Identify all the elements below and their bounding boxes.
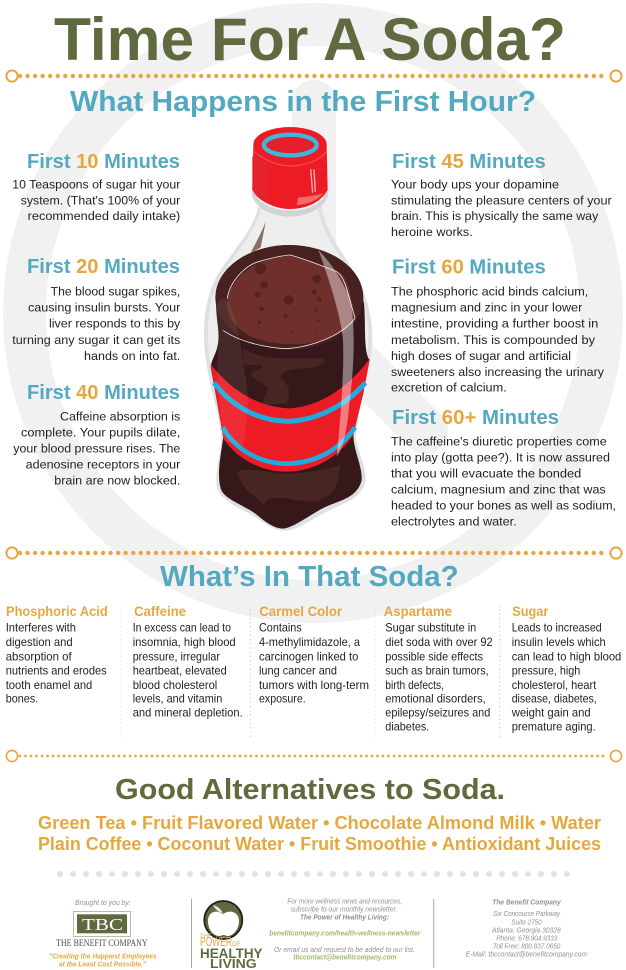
description bbox=[6, 622, 107, 705]
description: insomnia, high blood bbox=[133, 636, 236, 649]
column: caffeine bbox=[133, 603, 243, 720]
body text: Caffeine absorption is bbox=[60, 409, 180, 423]
panel: first 60+ minutes bbox=[391, 407, 616, 528]
column separators bbox=[121, 606, 500, 738]
background clock watermark bbox=[24, 24, 602, 602]
dotted divider three bbox=[6, 750, 622, 762]
body text: The blood sugar spikes, bbox=[51, 285, 180, 299]
body text bbox=[12, 177, 180, 223]
description bbox=[133, 622, 243, 720]
description: and mineral depletion. bbox=[133, 707, 243, 720]
description: diet soda with over 92 bbox=[385, 636, 493, 649]
body text bbox=[391, 285, 605, 395]
ingredient name: Carmel Color bbox=[259, 603, 343, 619]
heading: what's in that soda: What’s In That Soda? bbox=[160, 561, 459, 593]
footer divider left bbox=[190, 899, 192, 968]
body text: electrolytes and water. bbox=[391, 514, 517, 528]
description: exposure. bbox=[259, 692, 306, 705]
heading: First 10 Minutes bbox=[27, 151, 180, 173]
description: Interferes with bbox=[6, 622, 76, 635]
heading: First 40 Minutes bbox=[27, 382, 180, 404]
heading: First 60+ Minutes bbox=[392, 407, 559, 429]
description: In excess can lead to bbox=[133, 622, 231, 635]
description: levels, and vitamin bbox=[133, 692, 222, 705]
description: lung cancer and bbox=[259, 665, 337, 678]
description: can lead to high blood bbox=[512, 650, 621, 663]
description: nutrients and erodes bbox=[6, 665, 107, 678]
footer divider right bbox=[433, 899, 435, 968]
ingredient name: Sugar bbox=[512, 603, 549, 619]
body text: your blood pressure rises. The bbox=[13, 442, 181, 456]
column: carmel color bbox=[259, 603, 369, 705]
footer: company contact details: Suite 2750 bbox=[511, 917, 542, 926]
body text: magnesium and zinc in your lower bbox=[391, 301, 582, 315]
body text: recommended daily intake) bbox=[28, 209, 180, 223]
description: tumors with long-term bbox=[259, 679, 369, 692]
body text bbox=[12, 285, 181, 363]
glass left shading bbox=[217, 299, 248, 447]
footer: newsletter text: benefitcompany.com/health-wellness-newsletter bbox=[269, 928, 421, 937]
bottle label bbox=[211, 358, 370, 472]
description: such as brain tumors, bbox=[385, 665, 489, 678]
ingredient name: Aspartame bbox=[384, 603, 452, 619]
footer: the benefit company logo: "Creating the Happiest Employees bbox=[49, 952, 157, 961]
footer: newsletter text: subscribe to our monthly newsletter. bbox=[291, 905, 397, 914]
description: heartbeat, elevated bbox=[133, 665, 227, 678]
body text: 10 Teaspoons of sugar hit your bbox=[12, 177, 180, 191]
cola liquid bbox=[211, 245, 369, 529]
list of soda alternatives: Plain Coffee • Coconut Water • Fruit Smoothie • Antioxidant Juices bbox=[38, 833, 601, 854]
footer: the benefit company logo: at the Least Cost Possible." bbox=[59, 960, 147, 969]
footer: company contact details: E-Mail: tbccontact@benefitcompany.com bbox=[466, 950, 587, 959]
liquid swirl shapes bbox=[237, 348, 340, 505]
body text: turning any sugar it can get its bbox=[12, 333, 180, 347]
body text: liver responds to this by bbox=[49, 317, 181, 331]
ingredient name: Caffeine bbox=[134, 603, 186, 619]
body text bbox=[391, 177, 612, 239]
body text: hands on into fat. bbox=[84, 349, 180, 363]
body text: that you will evacuate the bonded bbox=[391, 467, 581, 481]
body text: metabolism. This is compounded by bbox=[391, 333, 596, 347]
list of soda alternatives bbox=[38, 812, 601, 854]
footer: the benefit company logo: Brought to you by: bbox=[75, 898, 131, 907]
footer: company contact details: The Benefit Company bbox=[492, 898, 561, 907]
body text: excretion of calcium. bbox=[391, 381, 507, 395]
heading: First 20 Minutes bbox=[27, 256, 180, 278]
body text: high doses of sugar and artificial bbox=[391, 349, 571, 363]
column: phosphoric acid bbox=[6, 603, 108, 705]
panel: first 10 minutes bbox=[12, 151, 180, 223]
footer: power of healthy living logo: POWER bbox=[200, 935, 232, 949]
column: sugar bbox=[511, 603, 621, 734]
description bbox=[511, 622, 621, 734]
panel: first 60 minutes bbox=[391, 256, 605, 395]
description: carcinogen linked to bbox=[259, 650, 358, 663]
footer: power of healthy living logo: OF bbox=[232, 942, 241, 948]
body text: system. (That's 100% of your bbox=[21, 193, 180, 207]
body text: heroine works. bbox=[391, 225, 473, 239]
body text: brain are now blocked. bbox=[54, 474, 180, 488]
body text: brain. This is physically the same way bbox=[391, 209, 599, 223]
footer: company contact details: Phone: 678.904.9333 bbox=[496, 933, 558, 942]
description: insulin levels which bbox=[512, 636, 606, 649]
description: emotional disorders, bbox=[385, 692, 486, 705]
footer: power of healthy living logo: HEALTHY bbox=[200, 945, 263, 961]
description: pressure, irregular bbox=[133, 650, 220, 663]
body text: sweeteners also increasing the urinary bbox=[391, 365, 605, 379]
footer: company contact details bbox=[466, 898, 587, 959]
bottle body shell bbox=[204, 207, 372, 531]
description: pressure, high bbox=[512, 665, 580, 678]
description: premature aging. bbox=[512, 721, 596, 734]
description: digestion and bbox=[6, 636, 73, 649]
body text: calcium, magnesium and zinc that was bbox=[391, 483, 606, 497]
body text: Your body ups your dopamine bbox=[391, 177, 559, 191]
footer: newsletter text: For more wellness news and resources, bbox=[287, 896, 402, 905]
footer: power of healthy living logo bbox=[200, 901, 263, 970]
dotted divider two bbox=[6, 547, 622, 559]
grey dotted footer divider bbox=[60, 871, 571, 877]
footer: company contact details: Six Concourse Parkway bbox=[493, 909, 561, 918]
description: Sugar substitute in bbox=[385, 622, 476, 635]
description: cholesterol, heart bbox=[512, 679, 597, 692]
footer: the benefit company logo bbox=[49, 898, 157, 969]
footer: power of healthy living logo: THE bbox=[200, 934, 212, 940]
body text bbox=[13, 409, 181, 488]
description: Contains bbox=[259, 622, 302, 635]
heading: First 60 Minutes bbox=[392, 256, 546, 278]
body text: complete. Your pupils dilate, bbox=[21, 426, 180, 440]
description: epilepsy/seizures and bbox=[385, 707, 490, 720]
dotted divider one bbox=[6, 70, 622, 82]
body text: intestine, providing a further boost in bbox=[391, 317, 598, 331]
footer: newsletter text: Or email us and request to be added to our list. bbox=[274, 945, 415, 954]
heading: First 45 Minutes bbox=[392, 151, 546, 173]
ingredient name: Phosphoric Acid bbox=[6, 603, 108, 619]
list of soda alternatives: Green Tea • Fruit Flavored Water • Chocolate Almond Milk • Water bbox=[38, 812, 601, 833]
body text: into play (gotta pee?). It is now assured bbox=[391, 451, 610, 465]
footer: the benefit company logo: TBC bbox=[82, 915, 123, 934]
description: Leads to increased bbox=[512, 622, 602, 635]
footer: newsletter text: tbccontact@benefitcompany.com bbox=[293, 953, 397, 962]
body text: The phosphoric acid binds calcium, bbox=[391, 285, 588, 299]
panel: first 45 minutes bbox=[391, 151, 612, 239]
glass right highlight bbox=[318, 250, 354, 457]
footer: company contact details: Atlanta, Georgia 30328 bbox=[491, 926, 562, 935]
column: aspartame bbox=[384, 603, 493, 734]
liquid surface bbox=[215, 245, 363, 350]
footer: newsletter text: The Power of Healthy Living: bbox=[300, 913, 389, 922]
neck ring bbox=[252, 192, 328, 217]
description: bones. bbox=[6, 692, 38, 705]
bottle cap bbox=[252, 127, 328, 209]
body text bbox=[391, 434, 616, 528]
soda bottle illustration bbox=[204, 127, 372, 531]
description: tooth enamel and bbox=[6, 679, 92, 692]
heading: what happens in the first hour: What Happens in the First Hour? bbox=[70, 86, 536, 118]
footer: newsletter text bbox=[269, 896, 421, 962]
title: Time For A Soda? bbox=[54, 6, 566, 73]
description bbox=[385, 622, 493, 734]
description: birth defects, bbox=[385, 679, 444, 692]
footer: company contact details: Toll Free: 800.837.0650 bbox=[493, 942, 561, 951]
heading: good alternatives: Good Alternatives to Soda. bbox=[115, 774, 505, 806]
description: diabetes. bbox=[385, 721, 429, 734]
soda bubbles bbox=[255, 263, 322, 334]
panel: first 40 minutes bbox=[13, 382, 181, 488]
description: absorption of bbox=[6, 650, 72, 663]
panel: first 20 minutes bbox=[12, 256, 181, 363]
description: disease, diabetes, bbox=[512, 692, 597, 705]
description: weight gain and bbox=[511, 707, 591, 720]
body text: headed to your bones as well as sodium, bbox=[391, 499, 616, 513]
footer: the benefit company logo: THE BENEFIT COMPANY bbox=[56, 939, 148, 949]
description bbox=[259, 622, 369, 705]
body text: The caffeine's diuretic properties come bbox=[391, 434, 607, 448]
description: 4-methylimidazole, a bbox=[259, 636, 361, 649]
body text: causing insulin bursts. Your bbox=[28, 301, 180, 315]
body text: adenosine receptors in your bbox=[26, 458, 180, 472]
description: blood cholesterol bbox=[133, 679, 217, 692]
description: possible side effects bbox=[385, 650, 483, 663]
body text: stimulating the pleasure centers of your bbox=[391, 193, 612, 207]
